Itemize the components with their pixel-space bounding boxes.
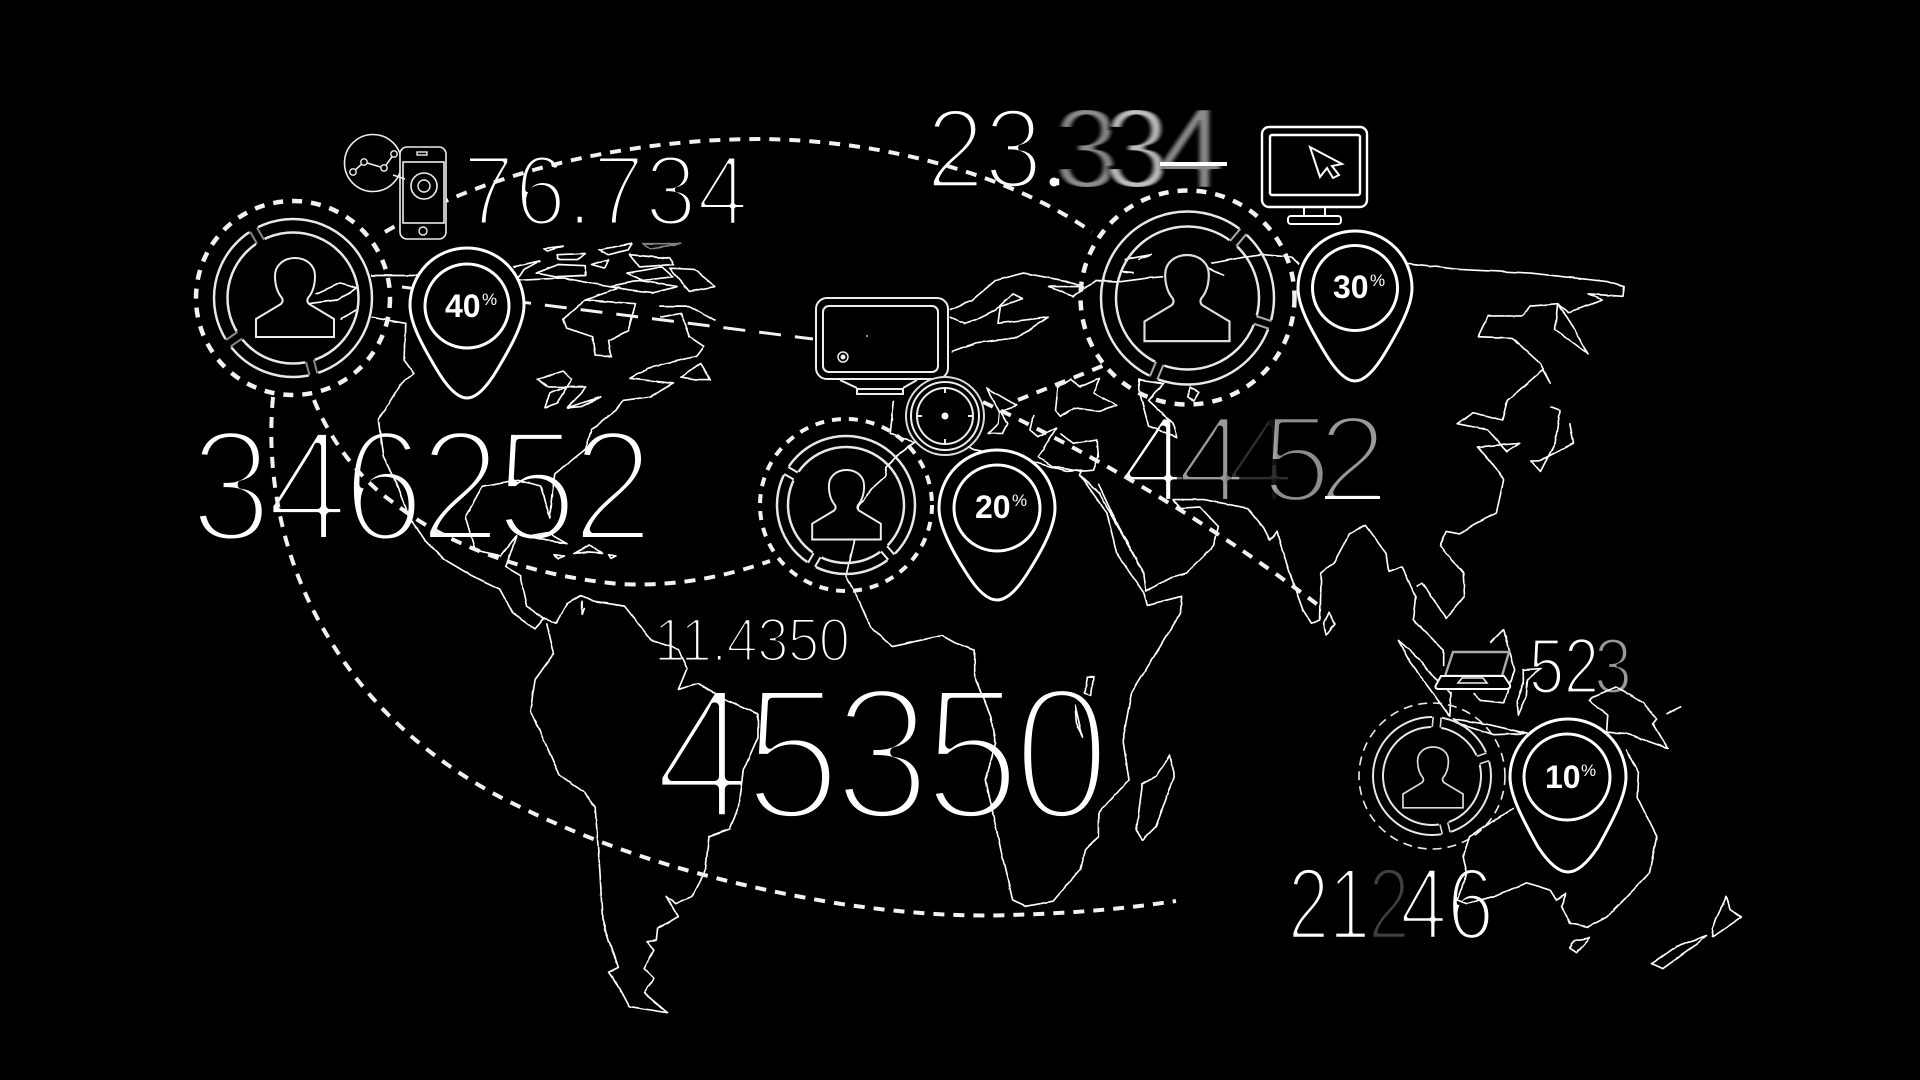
pin: 20%	[939, 450, 1055, 600]
dashed route: pin to monitor	[402, 287, 813, 339]
dashed route: left circle to middle circle	[314, 400, 770, 584]
dashed route: lower arc	[271, 397, 1176, 916]
number: 11.4350: 11.4350	[654, 607, 850, 675]
number: 523 with motion blur: 52	[1529, 621, 1599, 710]
pin: 20%: 20	[975, 489, 1011, 525]
number: 4452 with motion blur: 4	[1120, 391, 1189, 529]
number: 23.334 with motion blur: 23.	[926, 86, 1071, 213]
number: 4452 with motion blur: 4	[1226, 391, 1295, 529]
number: 76.734: 76.734	[463, 135, 748, 247]
pin: 10%	[1510, 719, 1626, 872]
number: 4452 with motion blur: 2	[1318, 391, 1387, 529]
pin: 20%: %	[1012, 491, 1027, 510]
user circle: africa	[760, 419, 932, 591]
number: 4452 with motion blur	[1120, 391, 1387, 529]
number: 23.334 with motion blur: 3	[1105, 86, 1168, 213]
pin: 40%: 40	[445, 288, 481, 324]
dashed route: upper arc	[385, 139, 1092, 232]
world map outline	[309, 244, 1741, 1013]
pin: 10%: 10	[1545, 759, 1581, 795]
user circle: north america	[196, 201, 390, 395]
number: 523 with motion blur: 3	[1594, 621, 1632, 710]
dashed route: target to Sri Lanka	[983, 402, 1322, 608]
number: 21246: 46	[1400, 847, 1494, 961]
number: 23.334 with motion blur	[926, 86, 1227, 213]
number: 4452 with motion blur: 4	[1177, 391, 1246, 529]
number: 23.334 with motion blur: 4	[1160, 86, 1223, 213]
user circle: australia	[1359, 703, 1505, 849]
dashed route: target to top right circle	[1018, 365, 1105, 400]
icon: laptop	[1435, 652, 1510, 689]
number: 21246: 2	[1368, 847, 1410, 961]
number: 21246: 21	[1288, 847, 1370, 961]
number: 4452 with motion blur: 5	[1262, 391, 1331, 529]
icon: central monitor	[816, 298, 948, 394]
number: 21246	[1288, 847, 1494, 961]
icon: target	[906, 377, 984, 455]
pin: 10%: %	[1581, 761, 1596, 780]
icon: desktop monitor with cursor	[1262, 127, 1367, 224]
pin: 30%: %	[1370, 271, 1385, 290]
number: 23.334 with motion blur: 3	[1055, 86, 1118, 213]
pin: 30%	[1298, 231, 1412, 381]
number: 45350: 45350	[654, 647, 1110, 860]
user circle: russia	[1080, 190, 1294, 404]
icon: phone with chart bubble	[344, 134, 446, 239]
pin: 30%: 30	[1333, 269, 1369, 305]
pin: 40%	[410, 248, 524, 398]
number: 346252: 346252	[190, 396, 654, 575]
pin: 40%: %	[482, 290, 497, 309]
